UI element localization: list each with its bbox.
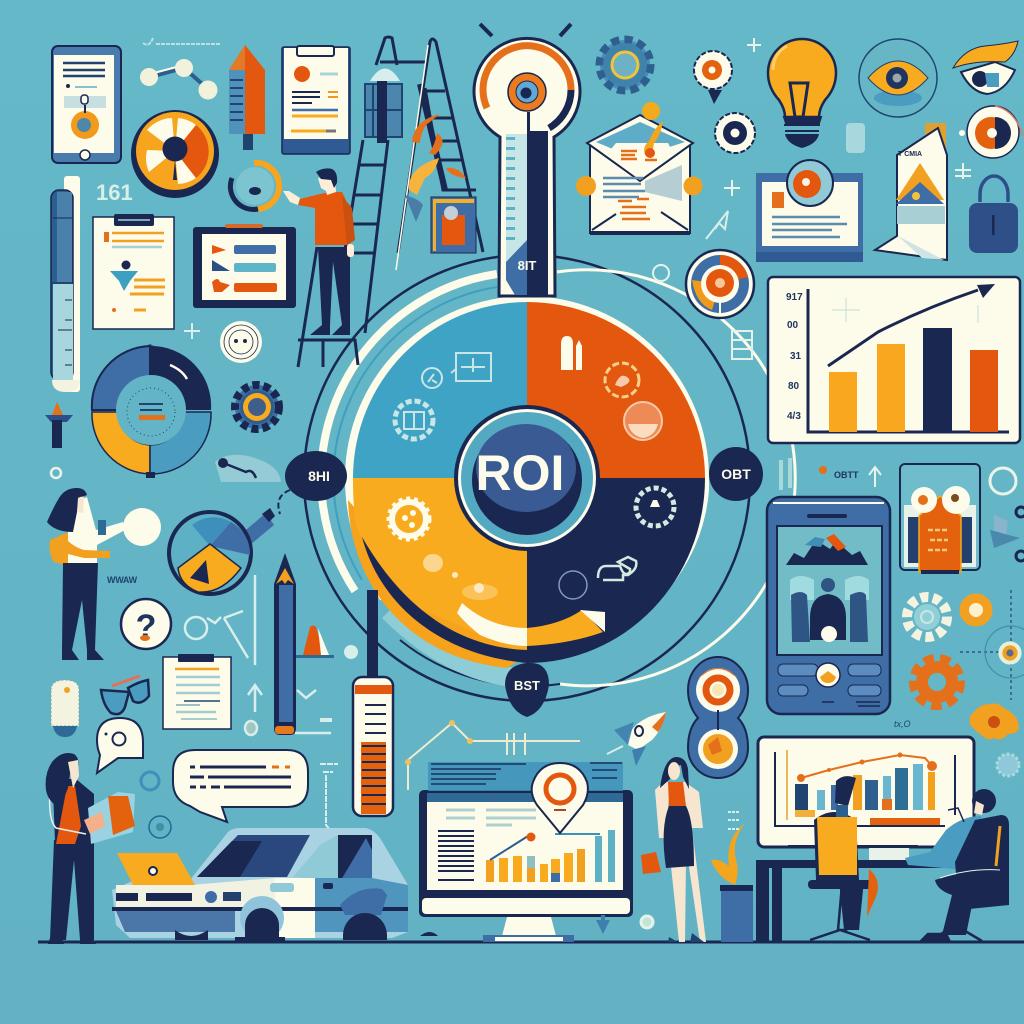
network target — [960, 590, 1024, 700]
axis labels: 80 — [788, 381, 800, 392]
label pill: bottom: BST — [514, 678, 540, 693]
orange gear — [916, 661, 958, 703]
eye with amber lid — [953, 41, 1018, 94]
clipboard left — [93, 214, 174, 329]
coil badge — [220, 321, 262, 363]
sprocket — [715, 113, 755, 153]
laptop on hood — [117, 853, 195, 885]
quadrant: amber — [353, 478, 527, 655]
note "161": 161 — [96, 180, 133, 205]
small multi-ring donut — [686, 250, 754, 318]
quadrant: orange — [527, 302, 705, 478]
plus signs — [724, 38, 971, 196]
glasses — [101, 676, 149, 714]
arrow and check marks — [245, 685, 332, 735]
navy quadrant icons — [559, 488, 674, 599]
crescent swoosh — [362, 537, 527, 663]
A-frame ladder — [376, 37, 483, 270]
bar chart panel — [768, 277, 1020, 443]
ghost jar — [846, 123, 865, 153]
light bulb — [768, 39, 836, 148]
tall pencil — [274, 553, 296, 735]
small circle mark — [51, 468, 61, 478]
man in orange on ladder — [283, 168, 355, 335]
amber quadrant icons — [388, 498, 498, 600]
woman standing — [641, 757, 706, 942]
doc with badge — [756, 160, 863, 262]
poster — [875, 123, 947, 260]
rocket — [607, 712, 666, 766]
half eye — [959, 106, 1023, 158]
large monitor with chart — [758, 737, 974, 847]
navy gear — [235, 385, 279, 429]
ladder left — [298, 140, 388, 367]
orange quadrant icons — [561, 336, 662, 440]
location pin — [532, 763, 588, 833]
squiggle note — [143, 38, 221, 45]
poster: T CMIA — [898, 151, 922, 158]
scribble label: WWAW — [107, 575, 138, 585]
question mark badge: ? — [136, 608, 156, 646]
amber blob gear — [970, 704, 1019, 739]
trend arrow — [828, 284, 995, 366]
desk — [756, 845, 951, 942]
axis labels: 4/3 — [787, 411, 801, 422]
rings small — [141, 772, 171, 838]
keyhole gauge — [474, 24, 580, 296]
dome — [420, 932, 438, 936]
right label tag: OBTT — [834, 470, 859, 480]
measuring handle — [353, 590, 393, 816]
cone marker — [296, 626, 358, 659]
ring gauge large — [92, 344, 211, 478]
tag — [51, 680, 79, 737]
blue quadrant icons — [395, 353, 492, 439]
monitor bars — [795, 764, 935, 810]
label pill: right: OBT — [721, 466, 751, 482]
car — [112, 828, 408, 941]
speech bubble — [173, 750, 308, 822]
central ROI wheel — [304, 255, 795, 701]
window on ladder — [365, 68, 402, 143]
quadrant: navy — [527, 478, 705, 663]
man on amber chair — [808, 776, 878, 940]
arrow swoosh — [457, 603, 605, 646]
seated man in blue — [869, 789, 1009, 942]
small caption dots — [728, 812, 740, 829]
amber gear — [961, 595, 991, 625]
line trend decoration — [405, 720, 580, 790]
bin — [720, 885, 753, 942]
bars — [829, 328, 998, 432]
side gear faint — [997, 754, 1019, 776]
figure-eight gauge — [688, 657, 748, 778]
outline ring marks — [653, 265, 752, 359]
label pill: left: 8HI — [308, 468, 330, 484]
left monitor with chart — [419, 790, 633, 942]
label pill: bottom — [505, 663, 549, 717]
outline circle — [990, 468, 1016, 494]
ribbons on ladder — [405, 114, 466, 222]
axis labels: 00 — [787, 320, 799, 331]
label pill: right — [709, 447, 763, 501]
mobile phone — [767, 497, 890, 714]
dashed trail — [278, 490, 290, 514]
pencil ruler — [229, 45, 265, 150]
right label tag — [781, 458, 881, 490]
axis labels — [786, 292, 803, 422]
axis labels: 31 — [790, 351, 802, 362]
ring gauge small — [230, 163, 279, 209]
blue header above monitor — [428, 762, 623, 791]
lightning post — [320, 764, 338, 835]
clipboard lower — [163, 654, 231, 729]
axis labels: 917 — [786, 292, 803, 303]
pale mini gear — [641, 916, 653, 928]
clipboard top — [282, 46, 350, 154]
gauge label: 8IT — [518, 258, 536, 273]
label pill: left — [285, 451, 347, 501]
gear pin bubble — [694, 51, 732, 104]
woman with sphere — [47, 488, 161, 660]
question mark badge — [121, 599, 171, 649]
orange donut — [131, 110, 219, 198]
connected nodes — [140, 59, 218, 100]
woman with book — [46, 753, 135, 944]
arrow scribble — [706, 211, 728, 239]
small speech bubble — [97, 718, 143, 773]
ROI label: ROI — [476, 445, 564, 501]
center hub — [454, 405, 600, 551]
envelope — [576, 102, 702, 235]
cable blob — [215, 455, 281, 482]
propeller mark — [990, 507, 1024, 561]
torch post — [45, 402, 73, 448]
screen with rows — [193, 224, 296, 308]
cream gear — [907, 597, 947, 637]
padlock — [969, 176, 1018, 253]
quadrant: blue — [353, 302, 527, 478]
down arrow mark — [596, 915, 610, 934]
tablet — [52, 46, 121, 163]
owl card — [900, 464, 980, 574]
framed picture — [431, 197, 476, 253]
plus mark — [184, 323, 200, 339]
plant — [711, 823, 745, 885]
pie magnifier — [169, 508, 275, 594]
thermometer ruler — [51, 176, 80, 392]
connector marks — [185, 575, 255, 665]
blue gear — [600, 40, 650, 90]
eye in circle — [859, 39, 937, 117]
scribble text: tx,O — [894, 719, 911, 729]
